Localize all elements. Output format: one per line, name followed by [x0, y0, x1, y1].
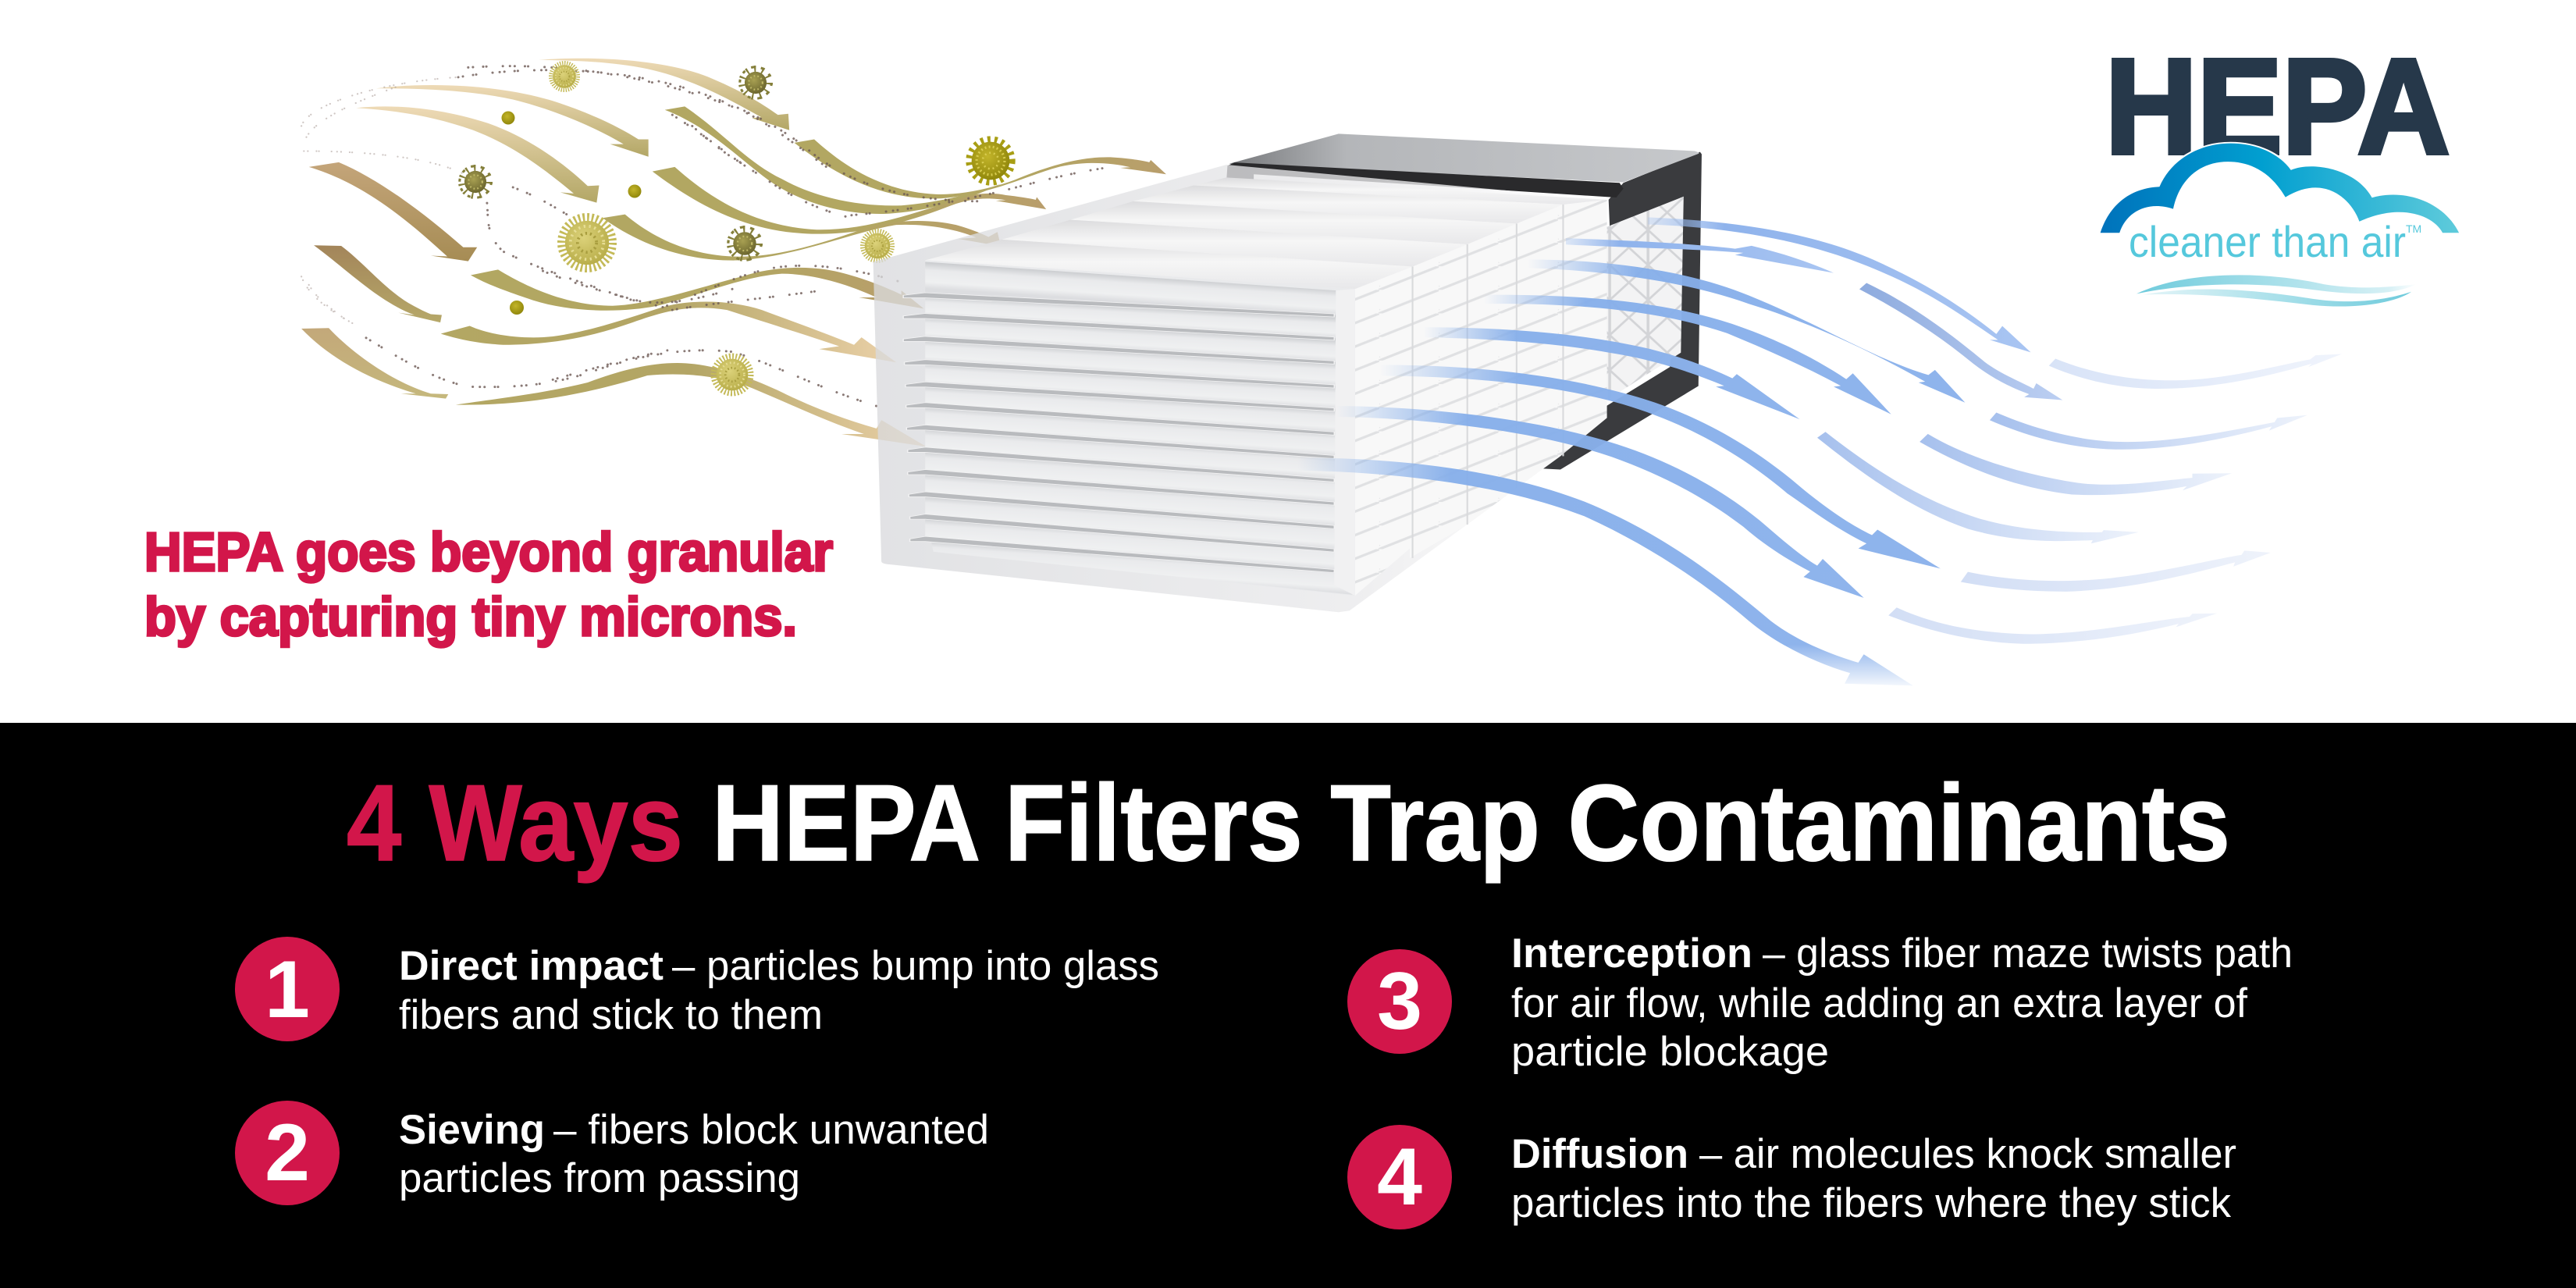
- HEPA logo: [2101, 30, 2459, 307]
- dust: dark main: [366, 66, 1105, 407]
- text block 2: [399, 1107, 989, 1201]
- text block 3: particle blockage: [1511, 1029, 1829, 1075]
- number badge 1: 1: [265, 945, 310, 1035]
- number badge 4: 4: [1377, 1132, 1422, 1222]
- callout: HEPA goes beyond granular: by capturing tiny microns.: [144, 586, 797, 647]
- arrow: tan top: [539, 59, 789, 130]
- filter: pleats: [925, 262, 1352, 595]
- virus 3: [460, 166, 491, 197]
- small spore 2: [628, 184, 642, 198]
- filter: pleat ledges: [903, 293, 1334, 573]
- text block 1: [399, 943, 1159, 1038]
- virus 7: [713, 356, 751, 393]
- number badge 3: 3: [1377, 956, 1422, 1047]
- item 3: interception: [1347, 930, 2293, 1075]
- filter: front face: [925, 260, 1355, 596]
- particle dust bands: [301, 66, 1105, 407]
- arrow: olive to tan wave 7: [456, 363, 927, 447]
- item 1: direct impact: [235, 937, 1159, 1041]
- HEPA filter unit: [873, 133, 1702, 612]
- text block 1: fibers and stick to them: [399, 992, 823, 1038]
- filter: plate edges: [1413, 205, 1563, 558]
- text block 3: – glass fiber maze twists path: [1763, 930, 2293, 977]
- text block 4: Diffusion: [1511, 1131, 1688, 1177]
- arrow: brown left: [309, 162, 477, 262]
- arrow: blue row 7: [1336, 406, 1864, 598]
- logo cloud: [2101, 144, 2459, 233]
- logo swoosh lower: [2143, 289, 2411, 307]
- number badge 3: [1347, 949, 1452, 1054]
- logo tagline: cleaner than air: [2129, 217, 2406, 266]
- text block 2: – fibers block unwanted: [553, 1107, 989, 1153]
- number badge 4: [1347, 1125, 1452, 1229]
- text block 4: – air molecules knock smaller: [1699, 1131, 2236, 1177]
- arrow: tan second: [376, 85, 649, 157]
- arrow: olive wave 2: [795, 140, 1166, 198]
- arrow: brown lower left: [314, 245, 442, 322]
- arrow: second stage 4: [1920, 434, 2232, 495]
- item 2: sieving: [235, 1101, 989, 1205]
- filter: side plates: [1355, 200, 1607, 596]
- incoming contaminated airflow arrows: [301, 59, 1166, 447]
- arrow: blue row 5: [1424, 327, 1800, 419]
- text block 3: Interception: [1511, 930, 1752, 977]
- arrow: blue row 4: [1484, 294, 1891, 415]
- text block 3: [1511, 930, 2293, 1075]
- arrow: second stage 3: [1990, 413, 2307, 450]
- text block 2: Sieving: [399, 1107, 545, 1153]
- arrow: blue row 6: [1379, 365, 1941, 568]
- arrow: olive wave 3: [653, 167, 1046, 234]
- virus particles: [460, 63, 1012, 393]
- arrow: olive wave 5: [471, 268, 923, 311]
- arrow: tan third: [356, 106, 600, 203]
- arrow: second stage 5: [1817, 432, 2139, 543]
- filter: lattice media: [1577, 197, 1684, 419]
- virus 4 large: [561, 217, 613, 269]
- logo trademark: TM: [2406, 222, 2421, 235]
- filter: glass housing: [873, 165, 1607, 612]
- arrow: second stage 6: [1961, 550, 2271, 592]
- virus 1: [551, 63, 578, 90]
- logo wordmark: HEPA: [2105, 30, 2450, 182]
- arrow: second stage 7: [1888, 607, 2217, 644]
- virus 6: [863, 231, 892, 261]
- arrow: tan bottom left: [301, 328, 448, 399]
- small spore 3: [510, 301, 524, 315]
- text block 4: particles into the fibers where they stick: [1511, 1180, 2231, 1226]
- text block 1: – particles bump into glass: [672, 943, 1159, 989]
- filter: front plate edge: [1334, 289, 1355, 596]
- arrow: second stage 1: [1859, 283, 2062, 400]
- filter: dark frame side: [1535, 152, 1702, 469]
- number badge 2: [235, 1101, 340, 1205]
- small spore 1: [501, 111, 515, 125]
- arrow: olive wave 1: [665, 106, 1001, 214]
- text block 1: Direct impact: [399, 943, 664, 989]
- arrow: blue row 3: [1528, 259, 1965, 403]
- arrow: olive wave 6: [441, 301, 896, 362]
- dust: faint left: [301, 77, 468, 324]
- virus 2: [740, 67, 771, 98]
- text block 4: [1511, 1131, 2236, 1226]
- virus 8: [969, 139, 1012, 183]
- item 4: diffusion: [1347, 1125, 2236, 1229]
- arrow: second stage 2: [2049, 354, 2342, 389]
- virus 5: [728, 227, 761, 260]
- filter: top cap: [1229, 133, 1699, 182]
- title: 4 Ways: [347, 763, 683, 884]
- arrow: olive wave 4: [603, 215, 1001, 261]
- text block 3: for air flow, while adding an extra layer of: [1511, 980, 2247, 1026]
- callout: HEPA goes beyond granular: HEPA goes beyond granular: [144, 521, 833, 582]
- callout: HEPA goes beyond granular: [144, 521, 833, 647]
- filter: top bands: [925, 177, 1607, 289]
- text block 2: particles from passing: [399, 1155, 800, 1201]
- outgoing clean airflow arrows: [1297, 217, 2342, 685]
- filter: cap underside: [1226, 162, 1624, 197]
- black lower panel: [0, 723, 2576, 1288]
- number badge 2: 2: [265, 1108, 310, 1198]
- logo swoosh upper: [2137, 275, 2417, 294]
- title: HEPA Filters Trap Contaminants: [712, 763, 2230, 884]
- arrow: blue row 2: [1566, 238, 1834, 273]
- arrow: blue row 8: [1297, 457, 1913, 685]
- white upper background: [0, 0, 2576, 723]
- arrow: blue row 1: [1648, 217, 2031, 352]
- number badge 1: [235, 937, 340, 1041]
